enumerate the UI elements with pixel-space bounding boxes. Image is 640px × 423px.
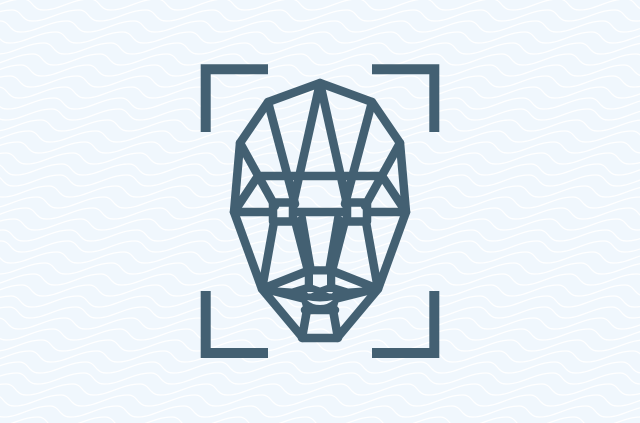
eye line and eyes bbox=[234, 202, 406, 222]
bracket: bottom left bbox=[206, 291, 268, 353]
bracket: top left bbox=[206, 69, 268, 132]
nostril gap bbox=[313, 274, 327, 288]
chin bbox=[302, 310, 338, 338]
nose bbox=[291, 212, 349, 285]
bracket: bottom right bbox=[372, 291, 434, 353]
mouth bbox=[262, 274, 378, 312]
cheeks bbox=[262, 222, 378, 289]
forehead lines bbox=[234, 83, 406, 212]
face outline bbox=[234, 83, 406, 338]
icon: focus frame brackets bbox=[206, 69, 434, 353]
icon: facial recognition mesh bbox=[234, 83, 406, 338]
bracket: top right bbox=[372, 69, 434, 132]
